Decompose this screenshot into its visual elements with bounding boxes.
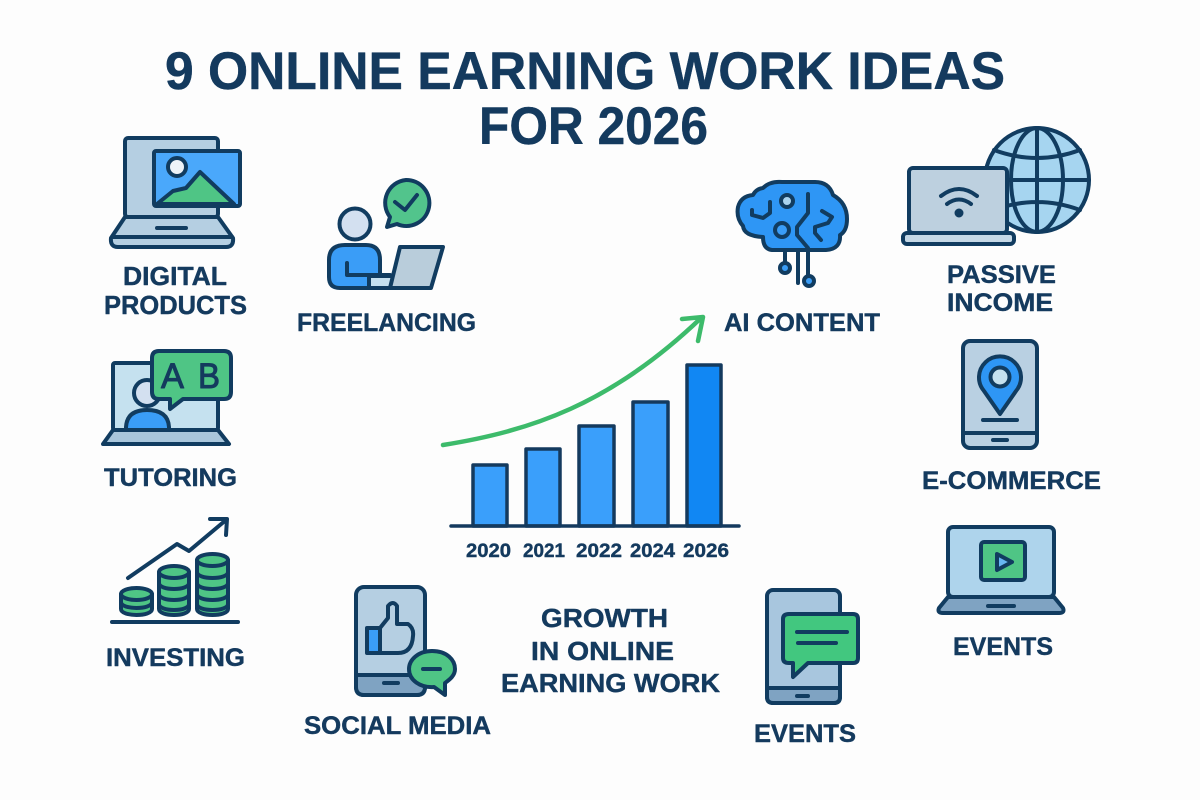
title [165,42,1005,156]
icon: laptop and globe [903,128,1089,244]
year labels: 2020 [466,541,511,562]
panel: events phone [754,590,858,748]
icon text: A B: A [161,357,185,396]
panel: freelancing [297,180,476,337]
panel: tutoring [103,351,237,492]
icon: phone with map pin [963,341,1037,448]
label: events laptop: EVENTS [953,633,1053,661]
icon text: A B: B [198,357,220,396]
label: events phone: EVENTS [754,720,856,748]
label: e-commerce: E-COMMERCE [922,467,1101,495]
chart caption: IN ONLINE [531,636,674,666]
label: passive income: PASSIVE [947,261,1056,289]
title: FOR 2026 [479,97,708,156]
icon text: A B [161,357,220,396]
panel: ai content [724,182,880,337]
label: ai content: AI CONTENT [724,309,880,337]
label: freelancing: FREELANCING [297,309,476,337]
icon: person at laptop [329,180,443,288]
title: 9 ONLINE EARNING WORK IDEAS [165,42,1005,101]
chart caption: GROWTH [541,603,668,633]
label: digital products: DIGITAL [123,261,227,291]
panel: passive income [903,128,1089,317]
arrow: growth trend [443,317,703,445]
icon: phone with thumbs up [356,587,455,695]
chart caption: EARNING WORK [501,668,720,698]
year labels: 2022 [576,541,622,562]
year labels [466,541,729,562]
chart caption [501,603,720,698]
year labels: 2024 [630,541,675,562]
icon: coin stacks with rising arrow [112,519,238,622]
label: tutoring: TUTORING [104,464,237,492]
year labels: 2021 [523,541,565,562]
panel: digital products [104,138,247,320]
label: passive income: INCOME [947,289,1053,317]
icon: laptop with play button [938,527,1064,613]
label: digital products [104,261,247,320]
label: social media: SOCIAL MEDIA [304,712,491,740]
icon: laptop with AB speech bubble [103,351,231,444]
bars [451,365,739,526]
panel: social media [304,587,491,740]
year labels: 2026 [683,541,729,562]
icon: laptop with image [111,138,240,247]
bar chart [443,317,739,562]
panel: e-commerce [922,341,1101,495]
icon: phone with chat bubble [767,590,858,703]
panel: events laptop [938,527,1064,661]
label: investing: INVESTING [106,644,245,672]
icon: circuit brain [738,182,847,286]
label: passive income [947,261,1056,317]
label: digital products: PRODUCTS [104,290,247,320]
panel: investing [106,519,245,672]
